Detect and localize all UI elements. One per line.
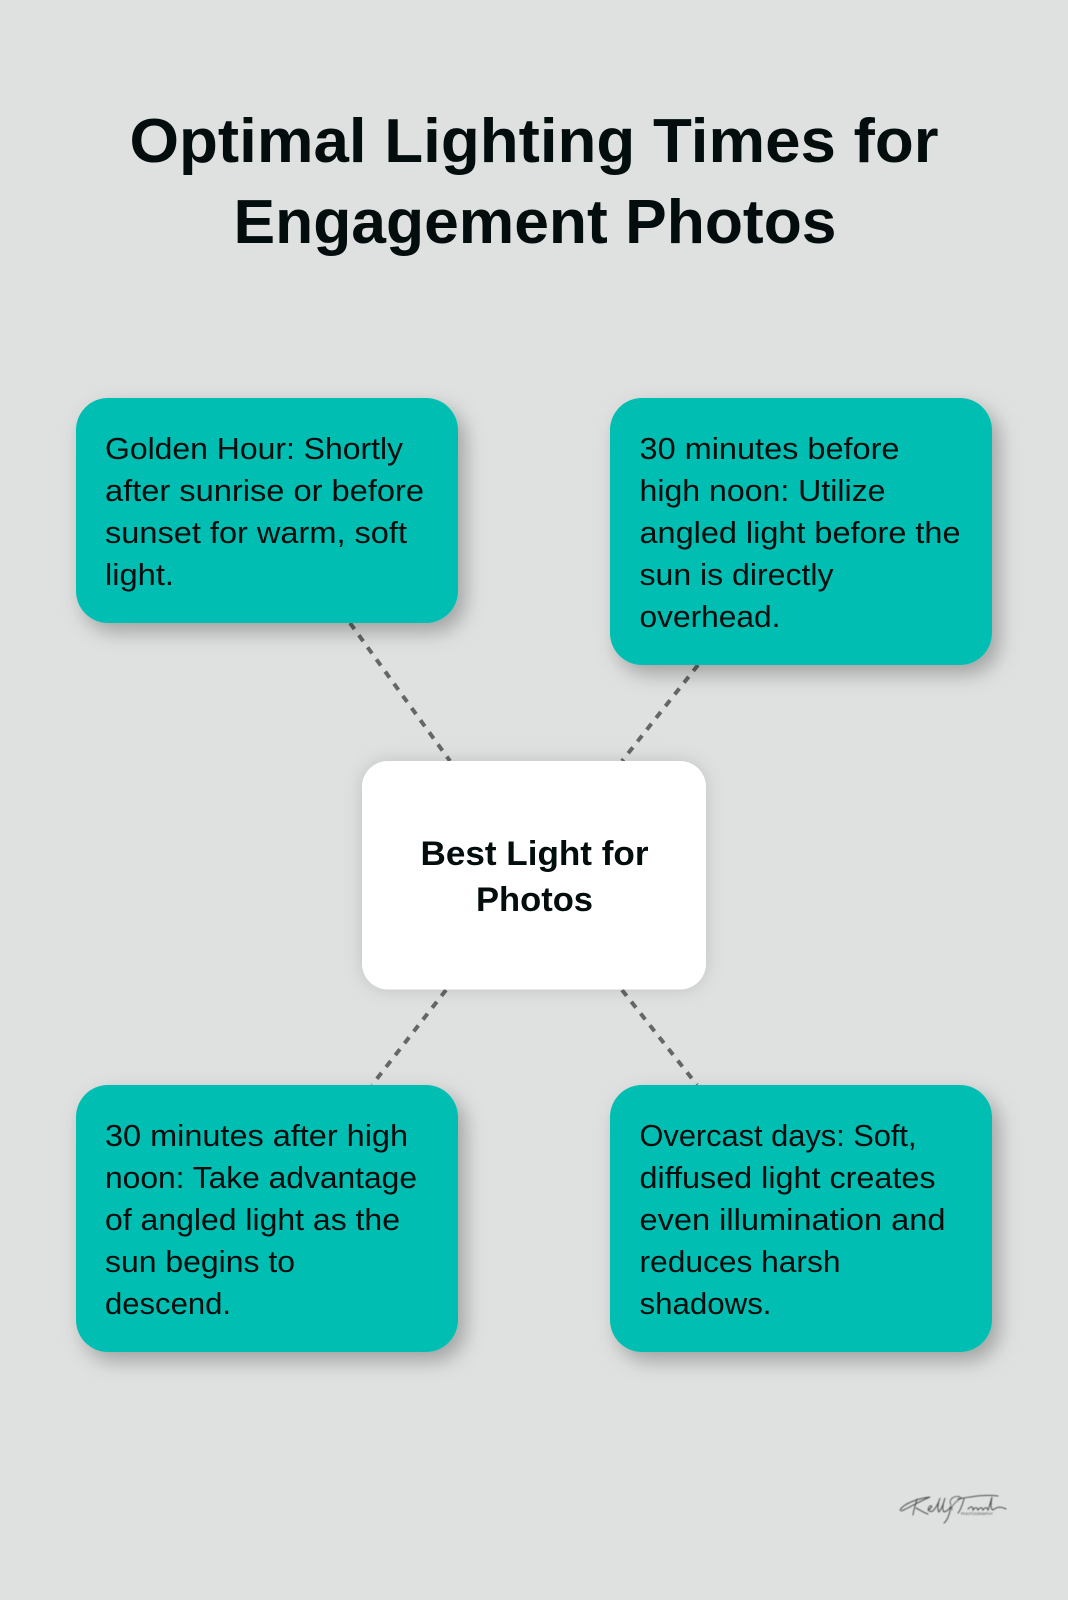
connector: top right: [622, 665, 698, 761]
panel: overcast days: [610, 1085, 992, 1352]
text: after high noon: [105, 1119, 417, 1321]
text: before high noon: 30 minutes before: [640, 432, 900, 466]
title: [130, 107, 938, 257]
text: before high noon: sun is directly: [640, 558, 834, 592]
center label: [420, 835, 648, 919]
text: overcast days: even illumination and: [640, 1203, 946, 1237]
panel: after high noon: [76, 1085, 458, 1352]
title: Engagement Photos: [234, 188, 836, 257]
text: golden hour: Golden Hour: Shortly: [105, 432, 404, 466]
text: overcast days: [640, 1119, 946, 1321]
text: after high noon: descend.: [105, 1287, 231, 1321]
text: overcast days: diffused light creates: [640, 1161, 936, 1195]
text: overcast days: Overcast days: Soft,: [640, 1119, 916, 1153]
text: golden hour: [105, 432, 424, 592]
connector: bottom right: [622, 990, 697, 1085]
text: overcast days: reduces harsh: [640, 1245, 840, 1279]
center label: Photos: [476, 881, 593, 919]
text: after high noon: of angled light as the: [105, 1203, 400, 1237]
text: after high noon: 30 minutes after high: [105, 1119, 408, 1153]
panel: before high noon: [610, 398, 992, 665]
logo: signature: [900, 1495, 1006, 1523]
text: golden hour: after sunrise or before: [105, 474, 424, 508]
connector: top left: [350, 623, 450, 761]
logo caption: PHOTOGRAPHY: [961, 1511, 993, 1516]
text: golden hour: light.: [105, 558, 174, 592]
text: before high noon: high noon: Utilize: [640, 474, 886, 508]
connector: bottom left: [372, 990, 446, 1085]
text: after high noon: sun begins to: [105, 1245, 295, 1279]
panel: golden hour: [76, 398, 458, 623]
text: golden hour: sunset for warm, soft: [105, 516, 408, 550]
text: after high noon: noon: Take advantage: [105, 1161, 417, 1195]
text: before high noon: angled light before the: [640, 516, 960, 550]
text: before high noon: [640, 432, 960, 634]
text: before high noon: overhead.: [640, 600, 780, 634]
title: Optimal Lighting Times for: [130, 107, 938, 176]
center label: Best Light for: [420, 835, 648, 873]
text: overcast days: shadows.: [640, 1287, 772, 1321]
panel: center: [362, 761, 706, 990]
